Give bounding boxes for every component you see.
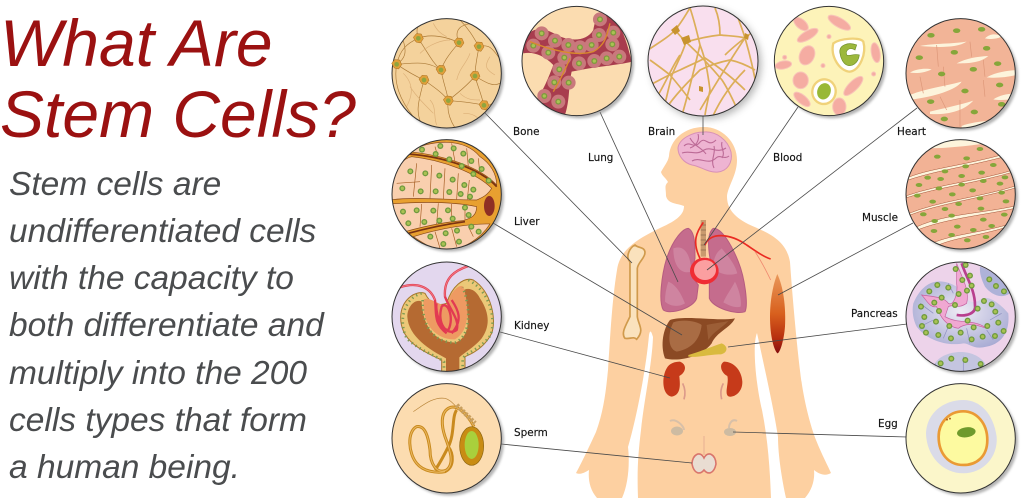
labels: Egg (878, 418, 898, 430)
organ: brain (678, 132, 731, 172)
labels: Muscle (862, 212, 898, 224)
description text block: a human being. (9, 449, 240, 486)
description text block: Stem cells are (9, 166, 221, 203)
description text block (9, 166, 325, 486)
liver (663, 318, 735, 360)
panel: muscle cells (903, 133, 1018, 252)
labels: Pancreas (851, 308, 898, 320)
panel: kidney cells (390, 260, 504, 374)
panel: blood cells (773, 5, 887, 118)
panel: sperm cell (392, 384, 504, 496)
labels: Sperm (514, 427, 548, 439)
trachea (695, 220, 711, 257)
labels: Blood (773, 152, 802, 164)
human body silhouette (576, 127, 831, 498)
organ: ovaries (670, 420, 737, 436)
labels: Lung (588, 152, 613, 164)
panel: lung cells (520, 3, 634, 118)
description text block: both differentiate and (9, 307, 325, 344)
description text block: undifferentiated cells (9, 213, 317, 250)
labels: Kidney (514, 320, 549, 332)
panel: bone cells (390, 17, 504, 131)
organ: bone (623, 245, 645, 339)
organ: muscle (770, 274, 785, 353)
leader lines (485, 107, 917, 463)
title (0, 6, 356, 151)
panel: liver cells (390, 137, 504, 252)
panel: heart cells (903, 17, 1018, 132)
labels: Liver (514, 216, 540, 228)
title: What Are (0, 6, 273, 80)
title: Stem Cells? (0, 77, 356, 151)
right lung (709, 228, 746, 313)
description text block: multiply into the 200 (9, 355, 307, 392)
labels: Brain (648, 126, 675, 138)
panel: brain cells (645, 3, 761, 119)
heart (690, 258, 719, 284)
organ: lungs, trachea, heart, liver and pancreas (661, 220, 771, 360)
labels: Heart (897, 126, 926, 138)
pancreas (688, 343, 726, 357)
labels (513, 126, 926, 439)
panel: pancreas cells (903, 260, 1018, 375)
panel: egg cell (906, 384, 1018, 496)
organ: kidneys (663, 362, 685, 399)
left lung (661, 228, 698, 312)
arteries (696, 222, 771, 259)
organ: testes (692, 436, 716, 473)
labels: Bone (513, 126, 539, 138)
description text block: with the capacity to (9, 260, 294, 297)
description text block: cells types that form (9, 402, 307, 439)
